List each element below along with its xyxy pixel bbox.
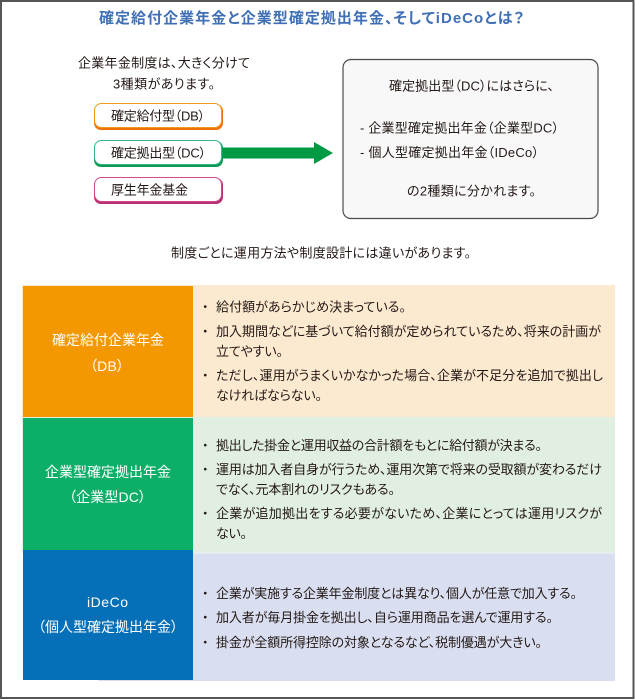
DB bullets: 給付額があらかじめ決まっている。 <box>216 300 406 314</box>
iDeCo bullets: ・ <box>202 610 209 625</box>
DB bullets: 加入期間などに基づいて給付額が定められているため、将来の計画が <box>216 324 601 339</box>
intro text <box>78 56 250 92</box>
panel: DC breakdown: - 個人型確定拠出年金（IDeCo） <box>360 145 539 160</box>
panel: DB row <box>22 285 615 418</box>
DB label: 確定給付企業年金 <box>52 332 164 348</box>
iDeCo label <box>23 550 193 680</box>
DB bullets: ・ <box>202 300 209 314</box>
panel: DC breakdown: 確定拠出型（DC）にはさらに、 <box>389 78 554 94</box>
intro text: 3種類があります。 <box>113 76 215 92</box>
intro text: 企業年金制度は、大きく分けて <box>78 56 250 70</box>
corporate DC bullets: 企業が追加拠出をする必要がないため、企業にとっては運用リスクが <box>216 506 602 521</box>
panel: corporate DC row <box>22 417 615 553</box>
DB bullets: ・ <box>202 324 209 339</box>
corporate DC bullets: 拠出した掛金と運用収益の合計額をもとに給付額が決まる。 <box>216 438 542 453</box>
arrow <box>222 142 333 164</box>
iDeCo bullets: 掛金が全額所得控除の対象となるなど、税制優遇が大きい。 <box>216 635 542 650</box>
pill: defined benefit <box>94 104 223 130</box>
corporate DC bullets: ・ <box>202 506 209 521</box>
pill: defined benefit: 確定給付型（DB） <box>111 108 205 124</box>
DB label <box>23 286 193 418</box>
panel: DC breakdown: - 企業型確定拠出年金（企業型DC） <box>360 120 559 136</box>
panel: DC breakdown: の2種類に分かれます。 <box>407 184 536 198</box>
iDeCo label: iDeCo <box>87 594 128 610</box>
DB bullets: 立てやすい。 <box>216 344 283 359</box>
title: 確定給付企業年金と企業型確定拠出年金、そしてiDeCoとは？ <box>99 9 524 27</box>
corporate DC label <box>23 418 193 550</box>
corporate DC label: （企業型DC） <box>69 489 146 505</box>
pill: pension fund <box>94 178 223 204</box>
DB bullets: ただし、運用がうまくいかなかった場合、企業が不足分を追加で拠出し <box>216 368 603 383</box>
DB bullets <box>202 300 603 403</box>
corporate DC bullets: でなく、元本割れのリスクもある。 <box>216 482 395 497</box>
iDeCo bullets: ・ <box>202 635 209 650</box>
pill: pension fund: 厚生年金基金 <box>111 182 188 198</box>
corporate DC bullets: ない。 <box>216 526 247 541</box>
DB bullets: ・ <box>202 368 209 383</box>
corporate DC bullets: ・ <box>202 438 209 453</box>
iDeCo bullets: ・ <box>202 586 209 601</box>
panel: iDeCo row <box>23 550 615 681</box>
iDeCo bullets: 加入者が毎月掛金を拠出し、自ら運用商品を選んで運用する。 <box>216 610 553 625</box>
corporate DC label: 企業型確定拠出年金 <box>45 464 171 480</box>
DB label: （DB） <box>90 358 124 374</box>
iDeCo bullets <box>202 586 577 650</box>
DB bullets: なければならない。 <box>216 388 322 403</box>
iDeCo bullets: 企業が実施する企業年金制度とは異なり、個人が任意で加入する。 <box>216 586 577 601</box>
lead text: 制度ごとに運用方法や制度設計には違いがあります。 <box>171 246 471 260</box>
panel: DC breakdown <box>343 60 598 218</box>
corporate DC bullets: 運用は加入者自身が行うため、運用次第で将来の受取額が変わるだけ <box>216 462 602 477</box>
iDeCo label: （個人型確定拠出年金） <box>38 619 178 635</box>
corporate DC bullets <box>202 438 602 541</box>
pill: defined contribution <box>94 140 223 167</box>
corporate DC bullets: ・ <box>202 462 209 477</box>
pill: defined contribution: 確定拠出型（DC） <box>111 146 206 160</box>
